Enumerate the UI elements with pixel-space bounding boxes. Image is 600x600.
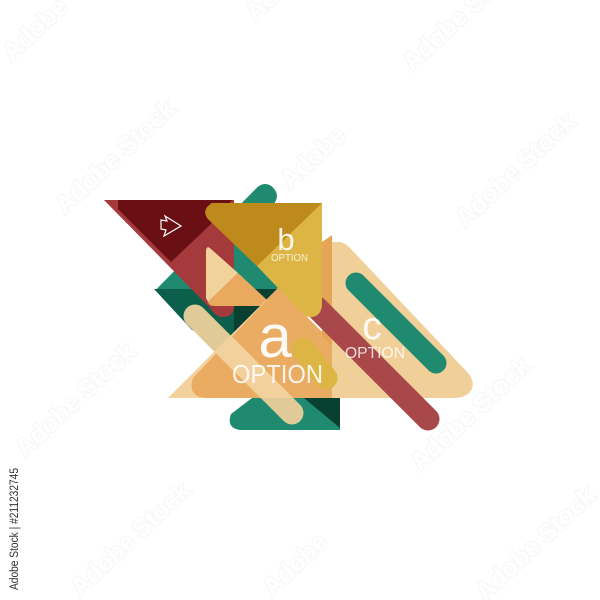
orange peach part	[208, 273, 267, 306]
letter c: c	[362, 305, 382, 348]
letter a: a	[258, 303, 292, 370]
watermark text: Adobe Stock	[65, 477, 196, 600]
panel: small peach triangle	[206, 247, 267, 306]
arrow icon	[161, 216, 181, 236]
option label a: OPTION	[232, 359, 323, 389]
panel: green shapes	[154, 185, 340, 430]
dark gold triangle	[205, 203, 322, 266]
light red triangle	[104, 200, 234, 317]
teal diagonal band	[158, 185, 296, 289]
watermark text: Adobe Stock	[405, 352, 536, 476]
dark green right section	[234, 289, 282, 336]
watermark text: Adobe Stock	[450, 108, 581, 232]
panel: red triangle	[104, 200, 234, 317]
light peach triangle	[168, 288, 332, 398]
panel: option a text	[232, 303, 323, 389]
yellow bar	[303, 349, 326, 378]
red bar	[316, 307, 428, 419]
teal bar	[356, 283, 436, 363]
bottom teal shape	[230, 398, 340, 430]
watermark text: Adobe Stock	[10, 338, 141, 462]
letter b: b	[277, 222, 295, 257]
beige rounded triangle c	[332, 235, 473, 398]
beige bar highlight	[214, 336, 293, 398]
panel: option b	[205, 203, 322, 317]
bottom dark green triangle	[304, 398, 340, 428]
image id text: Adobe Stock | #211232745	[9, 468, 21, 590]
watermark text: Adobe	[257, 528, 333, 600]
panel: option c text	[345, 305, 405, 362]
orange rounded triangle	[192, 288, 332, 398]
watermark text: Adobe	[275, 121, 351, 194]
light peach part	[206, 247, 238, 302]
yellow square	[205, 203, 322, 317]
option label c: OPTION	[345, 345, 405, 362]
beige bar	[195, 316, 292, 413]
maroon area	[118, 200, 232, 262]
orange strip	[322, 235, 332, 346]
dark green lower section	[154, 289, 288, 340]
watermark text: Adobe Stock	[50, 95, 181, 219]
option label b: OPTION	[271, 253, 308, 264]
panel: option a shapes	[168, 235, 332, 413]
infographic canvas	[9, 184, 473, 590]
